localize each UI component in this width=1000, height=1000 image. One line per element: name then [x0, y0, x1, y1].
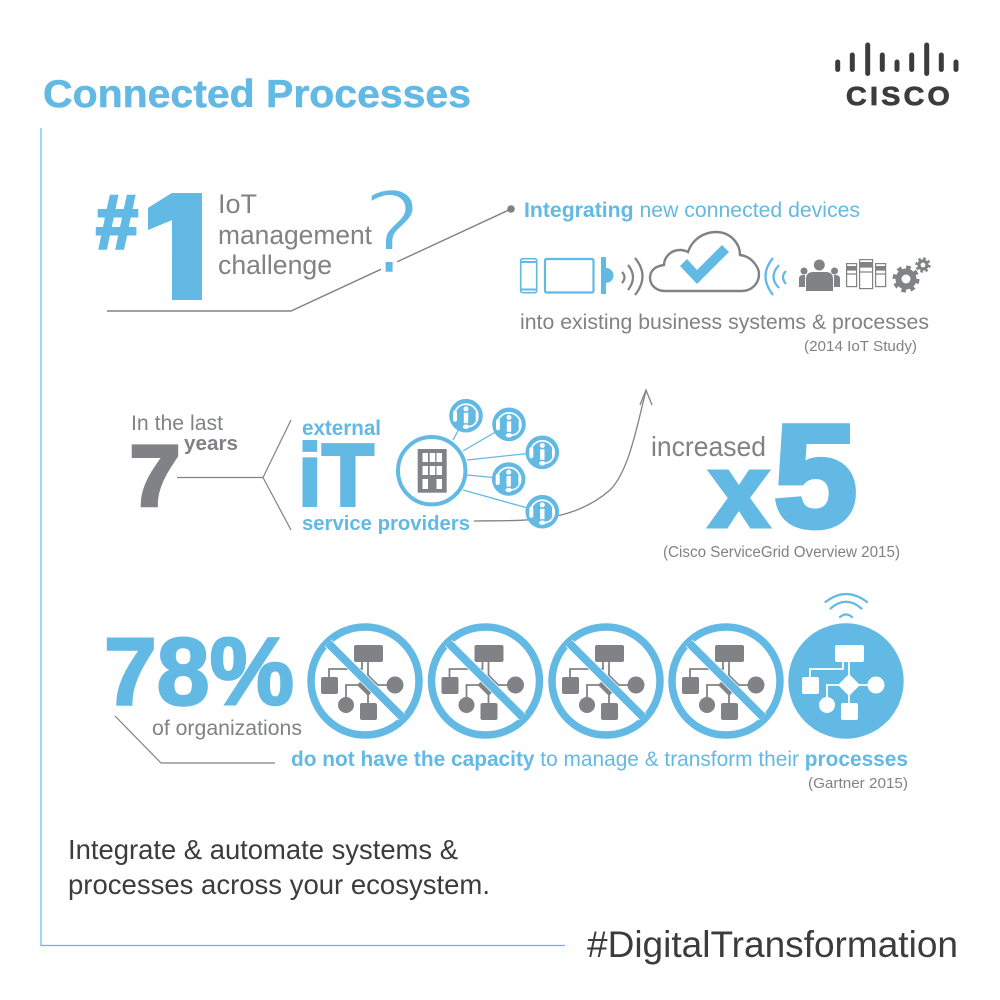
challenge label: [218, 189, 372, 280]
icon: cloud with check: [650, 232, 759, 291]
connector: [115, 716, 275, 763]
stat: #1: #: [96, 180, 138, 265]
icon: wifi: [826, 594, 867, 617]
big question mark: ?: [361, 167, 423, 302]
source: Cisco ServiceGrid: (Cisco ServiceGrid Overview 2015): [663, 544, 900, 561]
service providers label: service providers: [302, 512, 470, 535]
stat: x5: [710, 395, 857, 557]
stat: #1: [96, 193, 202, 300]
icon: gray signal waves: [622, 258, 642, 295]
leader line to integrating: [107, 205, 515, 311]
challenge label: management: [218, 220, 372, 250]
title: Connected Processes: [43, 73, 471, 116]
section: external IT service providers: [130, 390, 900, 561]
page frame: [41, 128, 565, 946]
stat: 78%: 78%: [104, 618, 294, 726]
icons: crossed-out process: [311, 627, 780, 735]
Cisco logo: [838, 45, 956, 111]
source: Gartner: (Gartner 2015): [808, 775, 908, 792]
conclusion text: Integrate & automate systems &: [68, 834, 458, 865]
in the last 7 years: [130, 412, 238, 524]
icon: gears: [894, 258, 930, 290]
stat: x5: x: [710, 434, 768, 548]
iT wordmark: iT: [298, 426, 374, 524]
challenge label: challenge: [218, 250, 332, 280]
icon: servers: [847, 260, 886, 289]
increased label: increased: [651, 431, 766, 462]
section: #1 IoT management challenge: [96, 190, 931, 354]
icon: wearable: [601, 257, 614, 294]
conclusion text: [68, 834, 490, 900]
capacity statement: do not have the capacity to manage & transform their processes: [291, 748, 908, 771]
integrating heading: Integrating new connected devices: [524, 199, 860, 222]
network lines: [453, 416, 542, 512]
icon: phone: [521, 259, 537, 293]
in the last 7 years: years: [184, 433, 238, 455]
external label: external: [302, 417, 381, 440]
Cisco logo: CISCO: [846, 81, 953, 111]
icon: blue signal waves: [766, 258, 786, 295]
stat: x5: 5: [774, 395, 857, 557]
organizations label: of organizations: [152, 717, 302, 740]
in the last 7 years: In the last: [131, 412, 223, 435]
integrating caption: into existing business systems & processes: [520, 310, 929, 334]
icons: support headsets: [449, 399, 559, 528]
icon: building hub: [398, 437, 465, 504]
icon: tablet: [545, 259, 594, 292]
in the last 7 years: 7: [130, 429, 180, 524]
section: 78% of organizations: [104, 594, 908, 792]
challenge label: IoT: [218, 189, 257, 219]
growth curve arrow: [474, 390, 652, 521]
icon: connected process: [788, 594, 904, 739]
source: 2014 IoT Study: (2014 IoT Study): [804, 338, 917, 355]
hashtag: #DigitalTransformation: [587, 924, 958, 965]
stat: #1: 1: [130, 160, 216, 333]
forked connector: [177, 420, 291, 530]
icon: people: [799, 260, 840, 291]
conclusion text: processes across your ecosystem.: [68, 869, 490, 900]
